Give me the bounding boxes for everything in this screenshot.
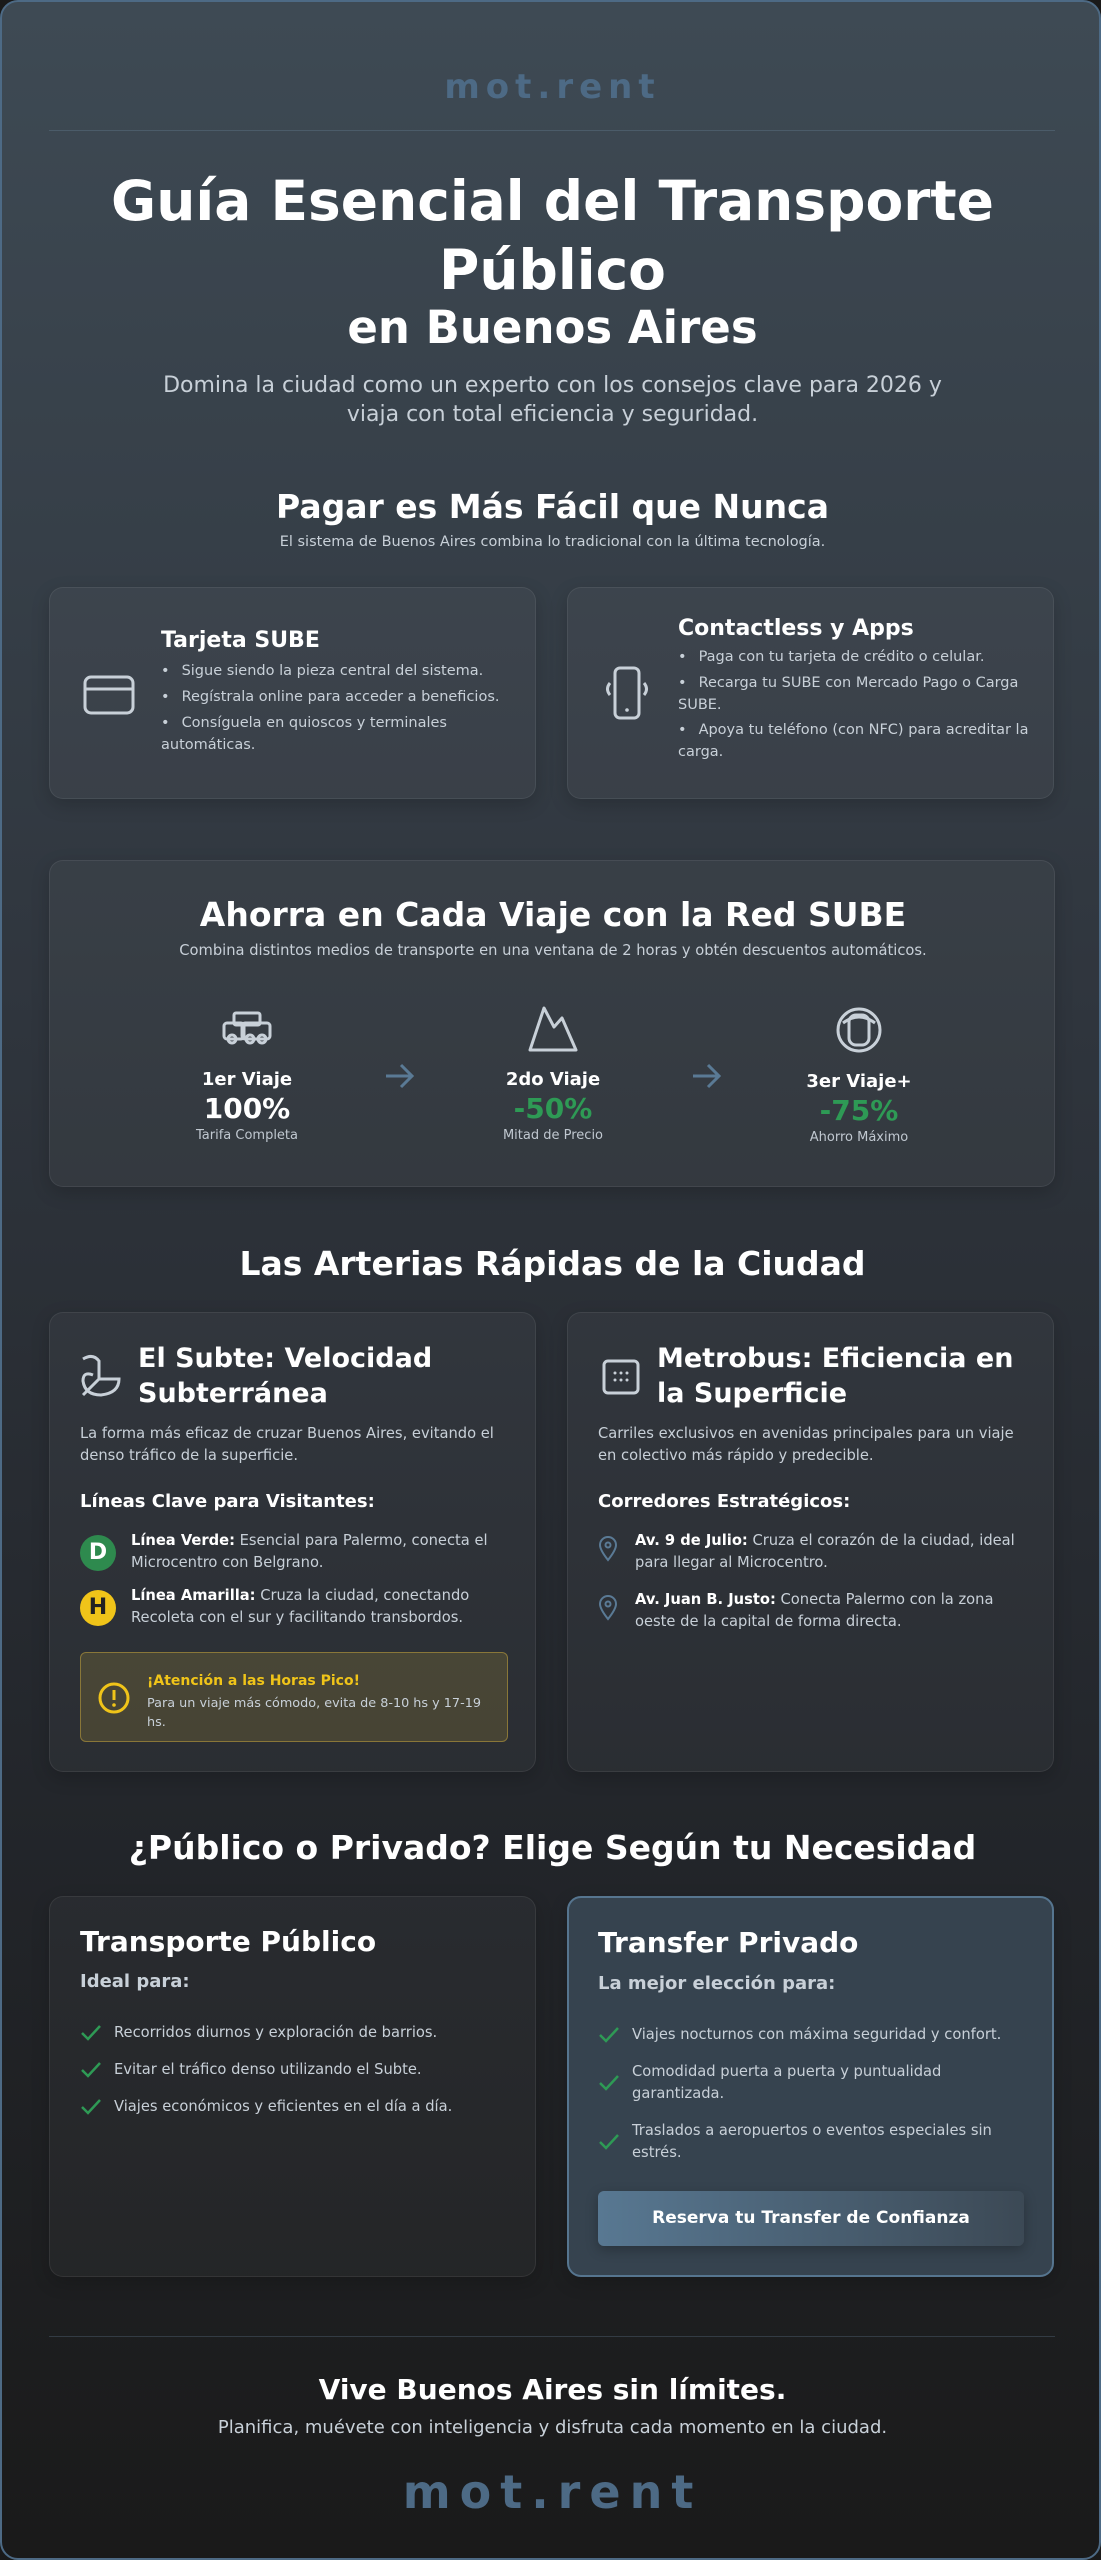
title: Público: [439, 238, 666, 302]
text: tarjeta SUBE: Sigue siendo la pieza central del sistema.: [182, 663, 483, 679]
panel: metrobus: [567, 1312, 1054, 1772]
panel: transporte publico: Transporte Público: [80, 1925, 376, 1958]
icon: bus: [602, 1360, 640, 1394]
step: 3er viaje: [806, 1008, 912, 1145]
heading: pagar: Pagar es Más Fácil que Nunca: [276, 487, 829, 526]
panel: ahorra red SUBE: [49, 860, 1055, 1187]
text: contactless: Contactless y Apps: [678, 616, 914, 641]
panel: transfer privado: [567, 1896, 1054, 2277]
text: tarjeta SUBE: Tarjeta SUBE: [161, 628, 320, 653]
panel: transporte publico: [49, 1896, 536, 2277]
line D: D: [89, 1540, 107, 1565]
panel: tarjeta SUBE: [49, 587, 536, 799]
button: reserva: [598, 2191, 1024, 2246]
logo top: mot.rent: [444, 67, 661, 107]
callout: horas pico: [80, 1652, 508, 1742]
panel: transporte publico: Ideal para:: [80, 1971, 190, 1992]
step: 1er viaje: [196, 1012, 298, 1143]
heading: publico o privado: ¿Público o Privado? Elige Según tu Necesidad: [129, 1828, 976, 1867]
line H: H: [89, 1595, 107, 1620]
title: [111, 169, 994, 302]
footer text: Planifica, muévete con inteligencia y disfruta cada momento en la ciudad.: [218, 2417, 887, 2438]
icon: card: [84, 676, 134, 714]
heading: arterias: Las Arterias Rápidas de la Ciudad: [239, 1244, 866, 1283]
step: 3er viaje: Ahorro Máximo: [810, 1130, 908, 1145]
step: 1er viaje: 100%: [204, 1092, 290, 1125]
list: publico: Viajes económicos y eficientes en el día a día.: [114, 2098, 452, 2115]
list: privado: Traslados a aeropuertos o eventos especiales sin estrés.: [632, 2122, 992, 2161]
list: privado: Viajes nocturnos con máxima seguridad y confort.: [632, 2026, 1001, 2043]
callout: horas pico: ¡Atención a las Horas Pico!: [147, 1673, 360, 1689]
line D: Línea Verde: Esencial para Palermo, conecta el Microcentro con Belgrano.: [131, 1532, 488, 1571]
step: 2do viaje: -50%: [514, 1092, 592, 1125]
panel: transfer privado: La mejor elección para:: [598, 1973, 835, 1994]
list: publico: Recorridos diurnos y exploración de barrios.: [114, 2024, 437, 2041]
subtitle: viaja con total eficiencia y seguridad.: [347, 402, 758, 427]
step: 3er viaje: 3er Viaje+: [806, 1071, 912, 1092]
title: subte: El Subte: Velocidad Subterránea: [138, 1343, 432, 1409]
panel: transfer privado: Transfer Privado: [598, 1926, 858, 1959]
subheading: ahorra: Combina distintos medios de transporte en una ventana de 2 horas y obtén descuentos automáticos.: [179, 942, 927, 959]
icon: phone: [606, 666, 648, 720]
text: tarjeta SUBE: [161, 628, 499, 753]
corridor 9 de julio: Av. 9 de Julio: Cruza el corazón de la ciudad, ideal para llegar al Microcentro.: [635, 1532, 1015, 1571]
list: privado: [599, 2026, 1001, 2161]
step: 2do viaje: 2do Viaje: [506, 1069, 600, 1090]
desc: subte: La forma más eficaz de cruzar Buenos Aires, evitando el denso tráfico de la superficie.: [80, 1425, 494, 1464]
list: privado: Comodidad puerta a puerta y puntualidad garantizada.: [632, 2063, 941, 2102]
subtitle: Domina la ciudad como un experto con los consejos clave para 2026 y: [163, 373, 942, 398]
desc: metrobus: Carriles exclusivos en avenidas principales para un viaje en colectivo más rápido y predecible.: [598, 1425, 1014, 1464]
list: publico: [81, 2024, 452, 2115]
text: contactless: Apoya tu teléfono (con NFC) para acreditar la carga.: [678, 722, 1028, 760]
step: 2do viaje: Mitad de Precio: [503, 1128, 603, 1143]
heading: ahorra: Ahorra en Cada Viaje con la Red SUBE: [200, 895, 906, 934]
arrow 2: [693, 1064, 721, 1088]
text: contactless: Recarga tu SUBE con Mercado Pago o Carga SUBE.: [678, 675, 1018, 713]
step: 1er viaje: 1er Viaje: [202, 1069, 292, 1090]
title line 2: en Buenos Aires: [347, 301, 758, 354]
step: 3er viaje: -75%: [820, 1094, 898, 1127]
title: Guía Esencial del Transporte: [111, 169, 994, 233]
panel: subte: [49, 1312, 536, 1772]
corridor juan b justo: Av. Juan B. Justo: Conecta Palermo con la zona oeste de la capital de forma directa.: [635, 1591, 993, 1630]
text: tarjeta SUBE: Regístrala online para acceder a beneficios.: [182, 689, 499, 705]
text: contactless: Paga con tu tarjeta de crédito o celular.: [699, 649, 984, 665]
subheading: pagar: El sistema de Buenos Aires combina lo tradicional con la última tecnología.: [280, 534, 825, 550]
list: publico: Evitar el tráfico denso utilizando el Subte.: [114, 2061, 422, 2078]
callout: horas pico: Para un viaje más cómodo, evita de 8-10 hs y 17-19 hs.: [147, 1696, 481, 1730]
title: metrobus: Metrobus: Eficiencia en la Superficie: [657, 1343, 1013, 1409]
panel: contactless: [567, 587, 1054, 799]
arrow 1: [386, 1064, 414, 1088]
subheading: lineas clave: Líneas Clave para Visitantes:: [80, 1491, 375, 1512]
step: 2do viaje: [503, 1006, 603, 1143]
text: contactless: [678, 616, 1028, 760]
text: tarjeta SUBE: Consíguela en quioscos y terminales automáticas.: [161, 715, 447, 753]
step: 1er viaje: Tarifa Completa: [196, 1128, 298, 1143]
footer heading: Vive Buenos Aires sin límites.: [319, 2373, 786, 2406]
logo bottom: mot.rent: [403, 2465, 702, 2519]
subheading: corredores: Corredores Estratégicos:: [598, 1491, 850, 1512]
button: reserva: Reserva tu Transfer de Confianza: [652, 2208, 970, 2228]
subtitle: [163, 373, 942, 427]
icon: subte: [82, 1354, 120, 1396]
line H: Línea Amarilla: Cruza la ciudad, conectando Recoleta con el sur y facilitando transbordos.: [131, 1587, 469, 1626]
